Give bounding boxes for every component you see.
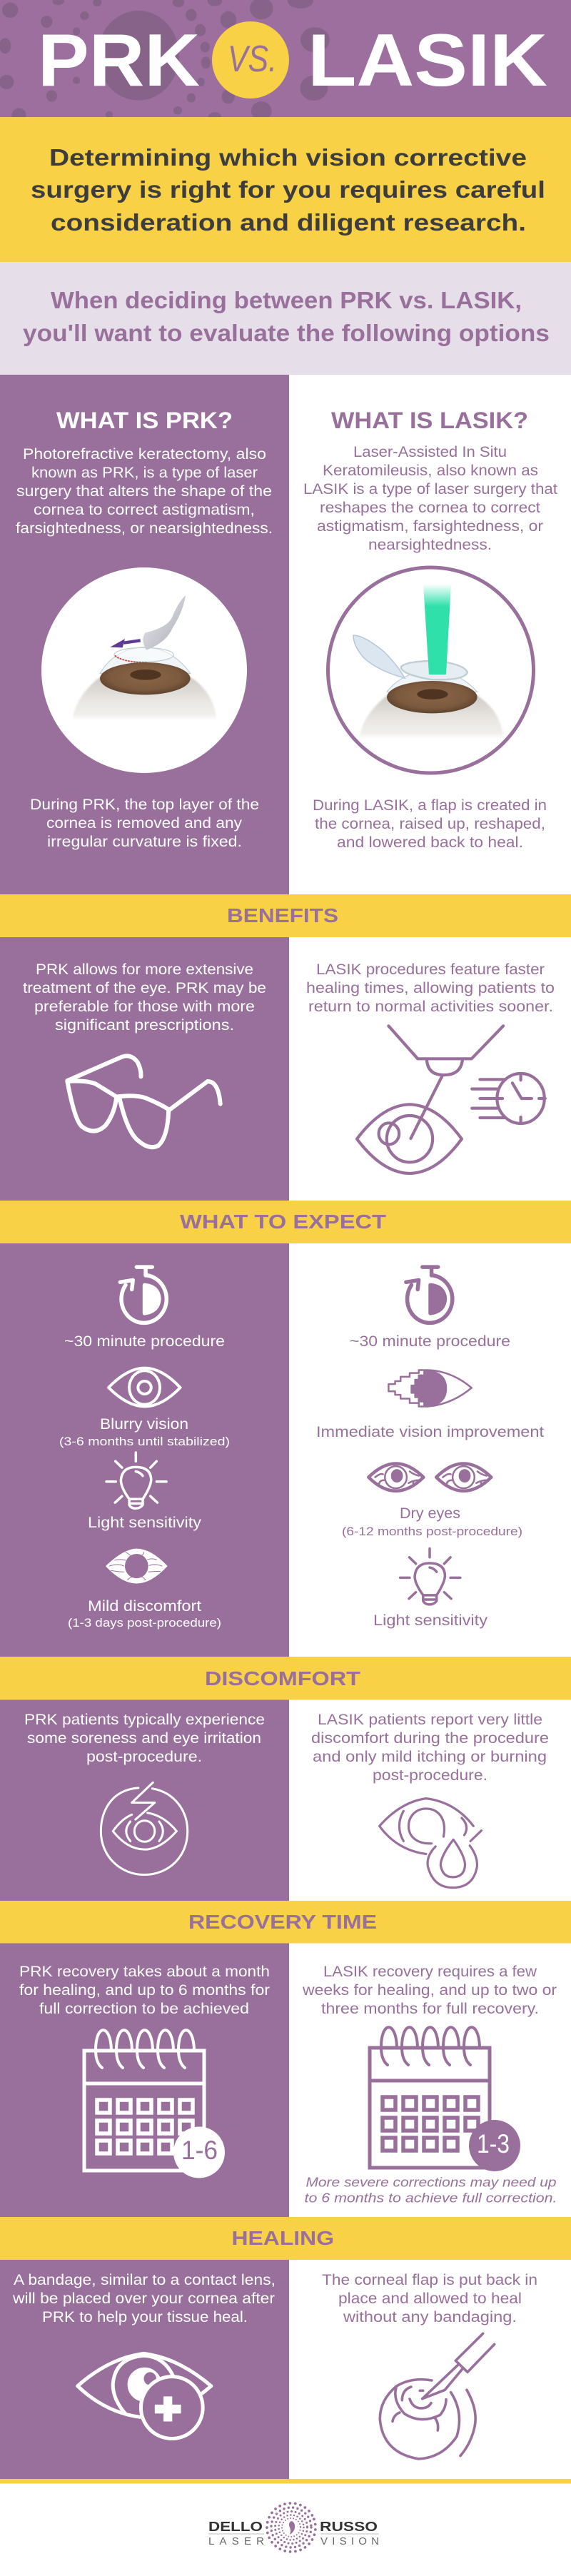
text: procedure length LASIK: ~30 minute procedure (350, 1333, 510, 1350)
text: during PRK: cornea is removed and any (46, 814, 242, 832)
text: LASIK healing: without any bandaging. (343, 2308, 517, 2325)
text: PRK benefits: PRK allows for more extensive (36, 961, 253, 978)
band: healing heading: HEALING (231, 2227, 334, 2249)
logo: Dello Russo Laser Vision: RUSSO (320, 2520, 378, 2534)
text: severe corrections note: to 6 months to achieve full correction. (304, 2190, 557, 2206)
text: dry eyes (342, 1505, 522, 1538)
icon: calendar LASIK: 1-3 (477, 2129, 510, 2158)
text: PRK discomfort (24, 1711, 265, 1765)
intro band: Determining which vision corrective (49, 144, 527, 171)
icon: vs badge: VS. (228, 39, 277, 80)
icon: vs badge (212, 21, 289, 99)
text: PRK definition: Photorefractive keratectomy, also (23, 445, 266, 463)
text: PRK discomfort: post-procedure. (86, 1748, 202, 1765)
icon: light bulb PRK (106, 1453, 166, 1508)
text: blurry vision (59, 1415, 230, 1448)
text: dry eyes: Dry eyes (400, 1505, 460, 1522)
logo: Dello Russo Laser Vision: VISION (320, 2535, 379, 2547)
text: dry eyes: (6-12 months post-procedure) (342, 1525, 522, 1538)
text: PRK definition: known as PRK, is a type of laser (31, 464, 258, 481)
text: LASIK recovery: weeks for healing, and up to two or (302, 1981, 557, 1999)
text: during LASIK: and lowered back to heal. (337, 834, 523, 851)
text: PRK healing: will be placed over your cornea after (12, 2290, 275, 2307)
icon: light bulb LASIK (400, 1549, 460, 1605)
band: benefits heading (0, 894, 571, 937)
text: LASIK healing (322, 2271, 537, 2325)
illustration: LASIK eye (328, 567, 534, 773)
text: LASIK healing: place and allowed to heal (338, 2290, 522, 2307)
text: PRK recovery: for healing, and up to 6 months for (19, 1981, 270, 1999)
text: PRK recovery: PRK recovery takes about a month (19, 1963, 270, 1980)
text: LASIK definition: Laser-Assisted In Situ (353, 443, 507, 460)
icon: eye with bandage (78, 2353, 211, 2439)
text: during LASIK (313, 797, 547, 851)
accent stripe (0, 2479, 571, 2484)
text: LASIK benefits: LASIK procedures feature faster (316, 961, 545, 978)
icon: eye with lightning (101, 1782, 188, 1875)
text: LASIK recovery: three months for full recovery. (321, 2000, 539, 2017)
icon: blurry eye (108, 1368, 181, 1406)
text: PRK definition (16, 445, 273, 537)
text: light sensitivity LASIK: Light sensitivity (373, 1612, 487, 1629)
intro band (0, 117, 571, 262)
text: LASIK definition: Keratomileusis, also known as (323, 462, 538, 479)
text: severe corrections note: More severe corrections may need up (305, 2174, 557, 2190)
icon: irritated eye (106, 1549, 168, 1584)
evaluate band: When deciding between PRK vs. LASIK, (51, 287, 522, 313)
text: PRK benefits (23, 961, 266, 1034)
text: LASIK discomfort (311, 1711, 549, 1784)
text: mild discomfort: Mild discomfort (88, 1597, 201, 1615)
text: LASIK discomfort: LASIK patients report very little (318, 1711, 542, 1728)
text: PRK recovery: full correction to be achieved (39, 2000, 249, 2017)
text: LASIK recovery: LASIK recovery requires a few (323, 1963, 537, 1980)
text: PRK healing (12, 2271, 276, 2325)
panel: what is LASIK (289, 375, 571, 894)
band: discomfort heading (0, 1657, 571, 1700)
icon: sharpening eye (388, 1370, 472, 1406)
band: what to expect heading: WHAT TO EXPECT (180, 1211, 386, 1233)
text: blurry vision: Blurry vision (100, 1415, 188, 1433)
section: discomfort (0, 1657, 571, 1901)
text: LASIK benefits: return to normal activities sooner. (308, 998, 553, 1015)
text: PRK definition: surgery that alters the shape of the (16, 483, 272, 500)
band: recovery heading: RECOVERY TIME (188, 1911, 377, 1933)
text: LASIK definition: nearsightedness. (368, 536, 492, 553)
text: LASIK definition (303, 443, 557, 553)
text: during LASIK: During LASIK, a flap is created in (313, 797, 547, 814)
section: benefits (0, 894, 571, 1201)
text: mild discomfort: (1-3 days post-procedure) (68, 1616, 221, 1630)
text: LASIK recovery (302, 1963, 557, 2017)
icon: stopwatch PRK (120, 1267, 166, 1323)
text: LASIK definition: LASIK is a type of laser surgery that (303, 480, 557, 497)
icon: stopwatch LASIK (406, 1267, 453, 1323)
icon: dry eyes (368, 1463, 491, 1491)
evaluate band (0, 262, 571, 375)
text: PRK benefits: treatment of the eye. PRK may be (23, 979, 266, 996)
text: blurry vision: (3-6 months until stabilized) (59, 1435, 230, 1448)
band: what to expect heading (0, 1201, 571, 1243)
panel: what is PRK (0, 375, 289, 894)
text: procedure length PRK: ~30 minute procedure (64, 1333, 225, 1350)
heading: what is PRK: WHAT IS PRK? (56, 408, 233, 433)
text: PRK healing: A bandage, similar to a contact lens, (14, 2271, 276, 2288)
logo: Dello Russo Laser Vision (208, 2496, 379, 2559)
section: healing (0, 2217, 571, 2479)
icon: glasses (67, 1056, 221, 1147)
illustration: PRK eye (41, 567, 247, 773)
band: benefits heading: BENEFITS (227, 904, 338, 926)
text: immediate improvement: Immediate vision improvement (316, 1423, 544, 1440)
text: PRK discomfort: PRK patients typically experience (24, 1711, 265, 1728)
icon: calendar PRK (84, 2030, 225, 2178)
intro band: surgery is right for you requires careful (31, 176, 545, 203)
text: severe corrections note (304, 2174, 557, 2206)
icon: eye with tear (380, 1799, 481, 1888)
text: PRK recovery (19, 1963, 270, 2017)
text: LASIK discomfort: discomfort during the procedure (311, 1729, 549, 1747)
section: what to expect (0, 1201, 571, 1657)
text: during LASIK: the cornea, raised up, reshaped, (315, 815, 545, 832)
text: LASIK healing: The corneal flap is put back in (322, 2271, 537, 2288)
intro band: consideration and diligent research. (51, 209, 526, 236)
text: PRK benefits: significant prescriptions. (55, 1016, 234, 1034)
text: PRK definition: farsightedness, or nearsightedness. (16, 520, 273, 537)
icon: calendar PRK: 1-6 (181, 2136, 218, 2165)
logo: Dello Russo Laser Vision: LASER (208, 2535, 264, 2547)
title: PRK: PRK (38, 19, 200, 102)
icon: calendar LASIK (370, 2027, 520, 2171)
band: recovery heading (0, 1901, 571, 1943)
logo: Dello Russo Laser Vision: DELLO (208, 2520, 263, 2534)
text: LASIK definition: astigmatism, farsightedness, or (317, 517, 543, 535)
text: during PRK (30, 796, 259, 850)
text: PRK benefits: preferable for those with more (34, 998, 255, 1015)
text: LASIK benefits: healing times, allowing patients to (306, 979, 555, 996)
text: light sensitivity PRK: Light sensitivity (88, 1514, 201, 1531)
text: LASIK discomfort: post-procedure. (373, 1767, 487, 1784)
text: LASIK definition: reshapes the cornea to correct (320, 499, 540, 516)
text: PRK discomfort: some soreness and eye irritation (27, 1729, 261, 1747)
section: recovery time (0, 1901, 571, 2217)
title: LASIK: LASIK (308, 19, 547, 102)
text: LASIK discomfort: and only mild itching or burning (313, 1748, 547, 1765)
band: discomfort heading: DISCOMFORT (205, 1667, 360, 1689)
icon: scalpel on eye (380, 2333, 495, 2459)
text: during PRK: irregular curvature is fixed. (47, 833, 242, 850)
band: healing heading (0, 2217, 571, 2260)
icon: laser eye and clock (357, 1026, 545, 1173)
header banner (0, 0, 571, 123)
heading: what is LASIK: WHAT IS LASIK? (331, 408, 528, 433)
text: LASIK benefits (306, 961, 555, 1015)
evaluate band: you'll want to evaluate the following options (23, 320, 550, 346)
text: PRK healing: PRK to help your tissue heal. (42, 2308, 248, 2325)
text: PRK definition: cornea to correct astigmatism, (34, 501, 255, 518)
text: mild discomfort (68, 1597, 221, 1630)
icon: dotted spiral (260, 2496, 323, 2559)
text: during PRK: During PRK, the top layer of the (30, 796, 259, 813)
